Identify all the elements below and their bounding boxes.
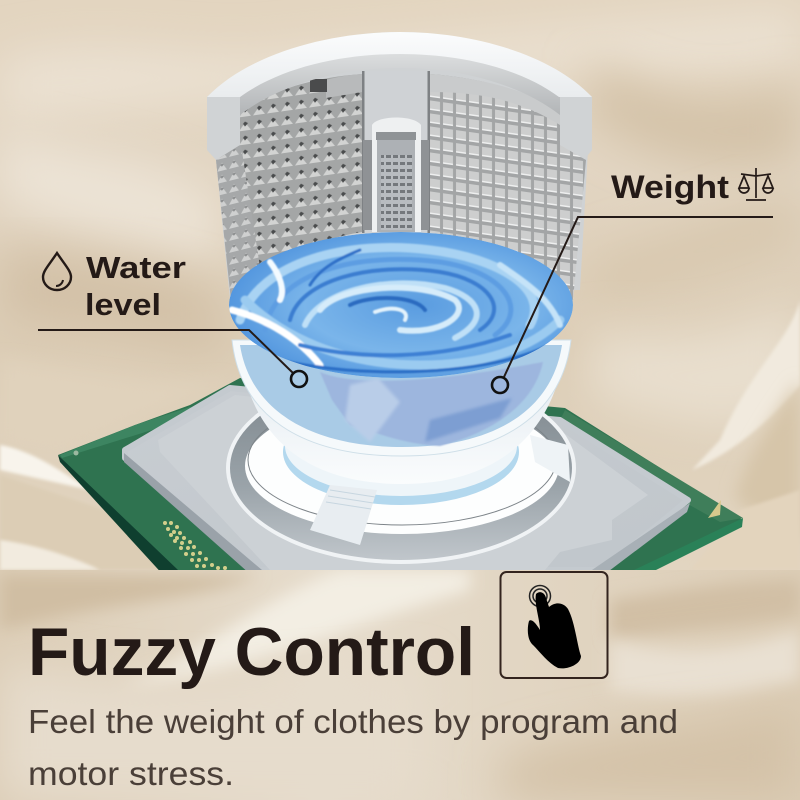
description text: [28, 703, 678, 792]
callout: water level: level: [85, 287, 161, 322]
mesh right: [430, 74, 586, 300]
background: silk upper: [0, 0, 800, 570]
mesh left: [216, 74, 362, 300]
icon: touch button: [500, 572, 608, 678]
callout: weight: [492, 168, 773, 393]
callout: water level: [38, 250, 307, 387]
leader line: [38, 330, 293, 373]
leader line: [504, 217, 773, 377]
rim inner shadow: [240, 53, 560, 115]
drum wall: [207, 32, 592, 300]
icon: corner marker: [708, 500, 721, 518]
bowl interior: [232, 340, 571, 456]
icon: water drop: [43, 253, 71, 290]
label: weight: Weight: [611, 169, 729, 205]
ribbon cable: [310, 485, 377, 545]
label: water level: Water: [86, 250, 186, 285]
description text: Feel the weight of clothes by program and: [28, 703, 678, 740]
washing drum: [207, 32, 592, 484]
icon: scales: [739, 168, 773, 200]
central pillar and filter: [362, 71, 430, 233]
circular plate recess: [226, 412, 576, 564]
side ribbon: [530, 435, 570, 482]
clothes: [320, 362, 543, 446]
title: Fuzzy Control: [28, 614, 475, 690]
white motor disc: [245, 429, 558, 534]
metal heat spreader: [124, 388, 690, 574]
background: silk lower band: [0, 570, 800, 800]
water surface: [229, 232, 573, 378]
icon: gold contact pads: [163, 521, 227, 570]
processor base: [58, 372, 743, 578]
description text: motor stress.: [28, 755, 234, 792]
green circuit board: [58, 378, 743, 578]
bowl outer: [240, 345, 565, 484]
rim top: [207, 32, 592, 97]
